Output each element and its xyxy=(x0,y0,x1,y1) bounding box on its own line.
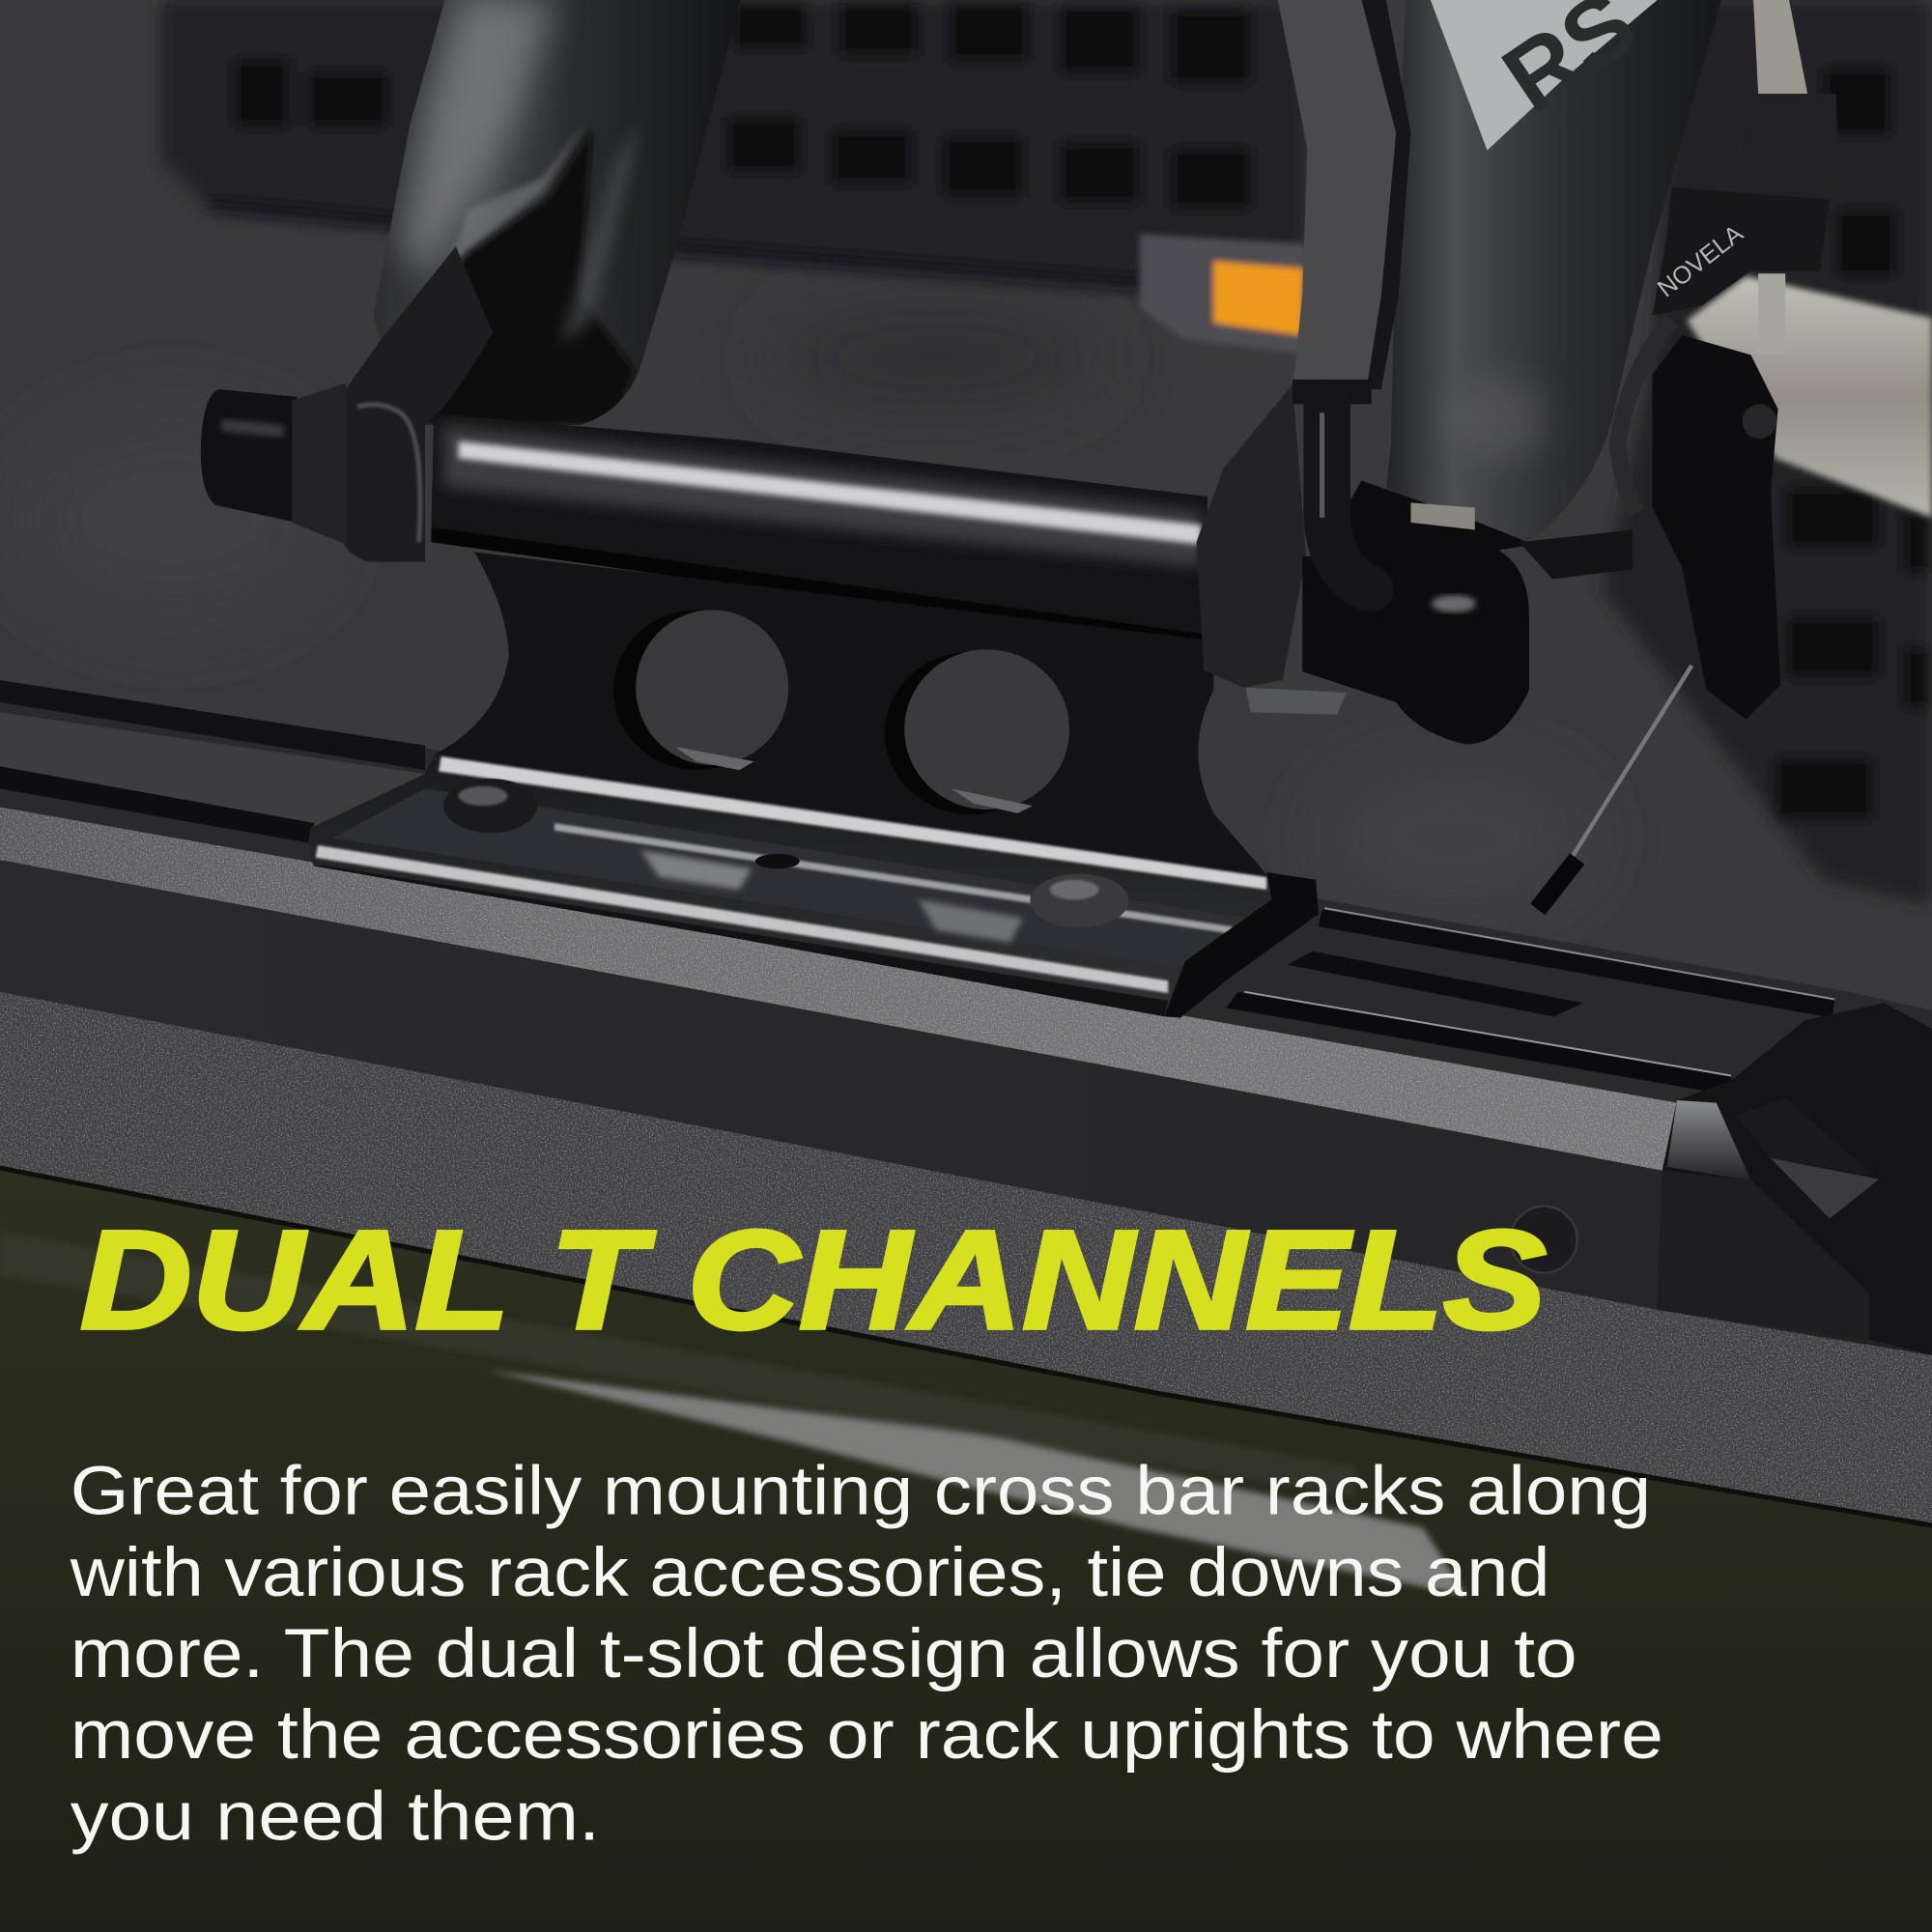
lower grey rail band xyxy=(0,992,1932,1525)
bolt left xyxy=(443,779,537,833)
base plate xyxy=(309,754,1319,1018)
pedal xyxy=(1140,234,1306,355)
body text: with various rack accessories, tie downs and xyxy=(70,1534,1550,1611)
carpet background xyxy=(0,0,1932,1233)
fork dropout xyxy=(336,246,493,562)
rail end cap xyxy=(1658,1003,1932,1355)
axle tube xyxy=(431,414,1208,650)
body text: Great for easily mounting cross bar racks along xyxy=(71,1453,1651,1530)
speckled rail highlight band xyxy=(0,807,1677,1171)
axle knob xyxy=(201,384,346,545)
rail dark side face xyxy=(0,860,1662,1310)
rail top surface xyxy=(0,680,1932,1233)
bolt right xyxy=(1030,873,1128,927)
body text: you need them. xyxy=(71,1777,600,1855)
body text: more. The dual t-slot design allows for you to xyxy=(71,1615,1577,1692)
black bracket end xyxy=(1164,872,1319,1018)
fork dropout and axle nut xyxy=(1197,380,1633,744)
fork logo xyxy=(1431,0,1658,151)
right molle panel xyxy=(1602,0,1932,906)
green painted truck side xyxy=(0,1168,1932,1932)
mounting screw xyxy=(1511,1207,1577,1273)
bracket hole right xyxy=(885,649,1069,814)
title: DUAL T CHANNELS xyxy=(80,1201,1547,1358)
brake pad strip xyxy=(1278,0,1410,389)
body text xyxy=(70,1453,1663,1855)
paint edge shadow xyxy=(0,1168,1932,1525)
caliper lettering: NOVELA xyxy=(1653,220,1748,302)
bracket hole left xyxy=(613,610,788,770)
brake cable xyxy=(1571,666,1691,859)
bolt centre xyxy=(755,854,800,868)
left fork leg xyxy=(336,0,741,562)
bike frame tube xyxy=(1687,276,1932,518)
right fork leg xyxy=(1386,0,1721,542)
brake caliper xyxy=(1538,0,1839,909)
fork mount bracket xyxy=(435,552,1269,877)
body text: move the accessories or rack uprights to where xyxy=(71,1696,1663,1774)
rear molle panel xyxy=(160,0,1306,298)
paint reflection xyxy=(0,1233,1466,1596)
